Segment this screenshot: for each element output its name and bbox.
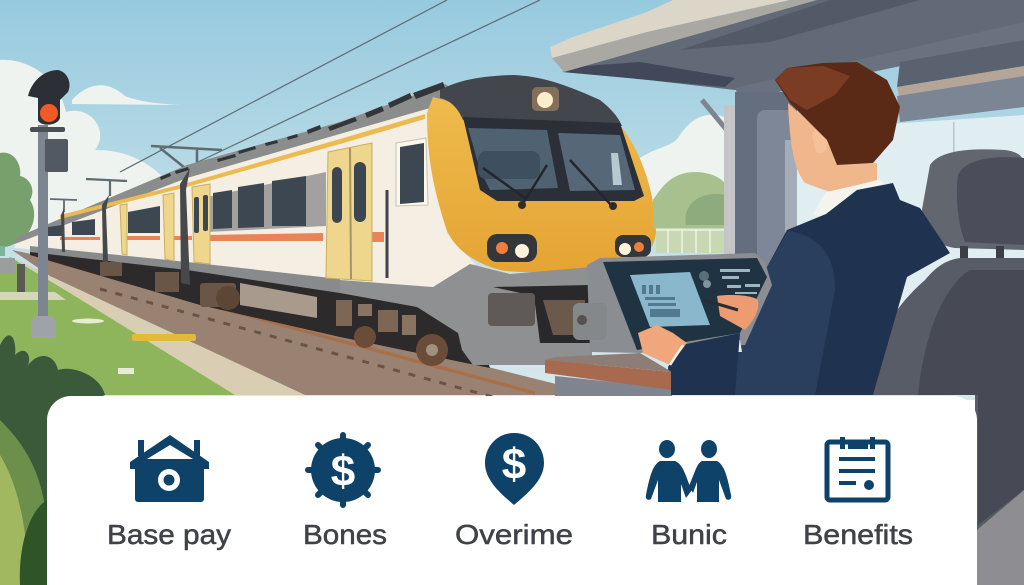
sky background (0, 0, 1024, 400)
roof vents (160, 82, 445, 180)
train (15, 75, 656, 368)
lower lights (487, 234, 651, 262)
headlamp top (532, 87, 559, 111)
icon: base pay house (130, 435, 209, 502)
coach orange stripe (60, 232, 384, 242)
icon: overtime pin with dollar: $ (502, 440, 526, 489)
pay components panel (47, 396, 977, 585)
window band nearest coach (207, 172, 326, 232)
coach gangways (61, 168, 190, 285)
label: benefits: Benefits (803, 519, 913, 550)
icon: benefits clipboard (827, 437, 888, 500)
railway track (50, 260, 535, 399)
coupler head (573, 303, 607, 340)
cab yellow front (427, 97, 656, 272)
buffer box (488, 293, 535, 326)
tablet controls (699, 269, 760, 294)
track ballast (12, 250, 560, 395)
windshield (463, 117, 644, 210)
right side window (797, 115, 1024, 395)
clouds (0, 60, 726, 245)
bush (0, 335, 105, 585)
cab dark roof (440, 75, 622, 126)
train bogies (100, 262, 448, 366)
signal head (28, 70, 70, 125)
icon: bonus gear with dollar: $ (331, 447, 355, 496)
canopy edge (550, 0, 790, 58)
icon: overtime pin with dollar (485, 433, 544, 505)
label: bunic: Bunic (651, 519, 727, 550)
cab grey nose (340, 264, 592, 365)
coach windows (48, 176, 306, 236)
tablet screen (630, 272, 710, 327)
ear (812, 128, 828, 153)
floor right (977, 490, 1024, 585)
coach doors (120, 143, 372, 281)
face and neck (788, 103, 877, 192)
train roof (15, 84, 470, 244)
walkway (10, 256, 305, 395)
canopy underside (562, 0, 1024, 90)
desk (545, 353, 672, 396)
label: overime: Overime (455, 519, 573, 550)
seat back (862, 258, 1024, 585)
coach roof stripe (60, 114, 425, 219)
yellow marker bar (132, 334, 196, 341)
foliage lower left (0, 420, 47, 585)
panel background (47, 396, 977, 585)
cab door (387, 138, 428, 278)
driver's hands and pen (638, 295, 758, 395)
station column (724, 92, 797, 270)
label: bones: Bones (303, 519, 387, 550)
door windows (194, 162, 366, 233)
headrest (921, 149, 1024, 250)
shirt collar (813, 180, 885, 218)
label: base pay: Base pay (107, 519, 231, 550)
signal red light (40, 104, 58, 122)
train underframe (30, 248, 490, 368)
icon: bonus gear with dollar (308, 435, 378, 505)
icon: two people (646, 440, 731, 502)
driver (668, 62, 950, 395)
coach lower skirt (30, 246, 340, 293)
hair (775, 62, 900, 165)
coach bodies (15, 108, 475, 288)
canopy bracket (702, 100, 730, 134)
canopy beams (735, 22, 1024, 100)
tree left (0, 153, 66, 300)
overhead wires and catenary posts (50, 0, 540, 212)
driver's seat (862, 149, 1024, 585)
console with tablet (587, 253, 772, 353)
grass verge (0, 257, 240, 395)
background trees and fence (653, 172, 725, 253)
signal post (28, 70, 70, 338)
jacket (668, 183, 950, 395)
coupler recess (493, 285, 593, 343)
train equipment boxes (240, 283, 317, 318)
grass details (72, 318, 134, 374)
platform canopy (550, 0, 1024, 134)
